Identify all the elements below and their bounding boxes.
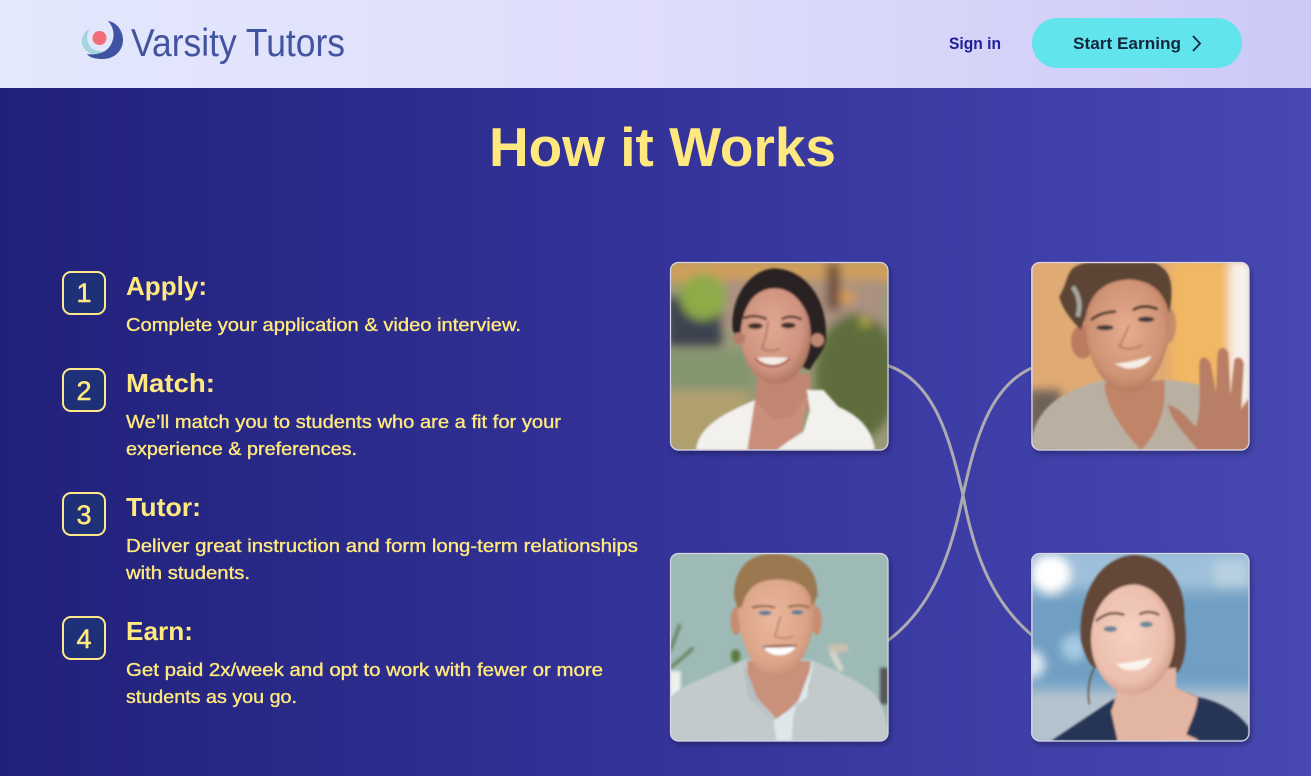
photo: man tutor — [669, 553, 888, 741]
step 3: Tutor: 3 — [76, 500, 92, 530]
connector curves — [886, 365, 1034, 642]
step 1: Apply: Complete your application & video interview. — [126, 315, 521, 335]
steps list — [63, 271, 638, 707]
button: Start Earning: Start Earning — [1073, 34, 1181, 53]
step 2: Match: Match: — [126, 368, 215, 398]
header bar — [0, 0, 1311, 88]
step 1: Apply: Apply: — [126, 271, 207, 301]
step 4: Earn: 4 — [76, 624, 92, 654]
step 4: Earn: Get paid 2x/week and opt to work with fewer or more — [126, 660, 603, 680]
photo: girl student — [1018, 551, 1254, 744]
step 3: Tutor: Deliver great instruction and form long-term relationships — [126, 536, 638, 556]
logo: Varsity Tutors: Varsity Tutors — [131, 22, 345, 65]
step 2: Match: We’ll match you to students who are a fit for your — [126, 412, 561, 432]
nav link: Sign in: Sign in — [949, 34, 1001, 53]
button: Start Earning — [1032, 18, 1242, 68]
step 3: Tutor: Tutor: — [126, 492, 201, 522]
photo: boy student waving — [1028, 260, 1253, 453]
step 4: Earn: Earn: — [126, 616, 193, 646]
step 3: Tutor — [63, 492, 638, 583]
step 2: Match — [63, 368, 561, 459]
title: How it Works — [489, 116, 836, 178]
photo: woman tutor — [667, 260, 898, 453]
step 1: Apply: 1 — [76, 278, 92, 308]
step 3: Tutor: with students. — [125, 563, 250, 583]
step 2: Match: experience & preferences. — [126, 439, 357, 459]
step 2: Match: 2 — [76, 376, 92, 406]
step 4: Earn — [63, 616, 603, 707]
step 1: Apply — [63, 271, 521, 335]
step 4: Earn: students as you go. — [126, 687, 297, 707]
